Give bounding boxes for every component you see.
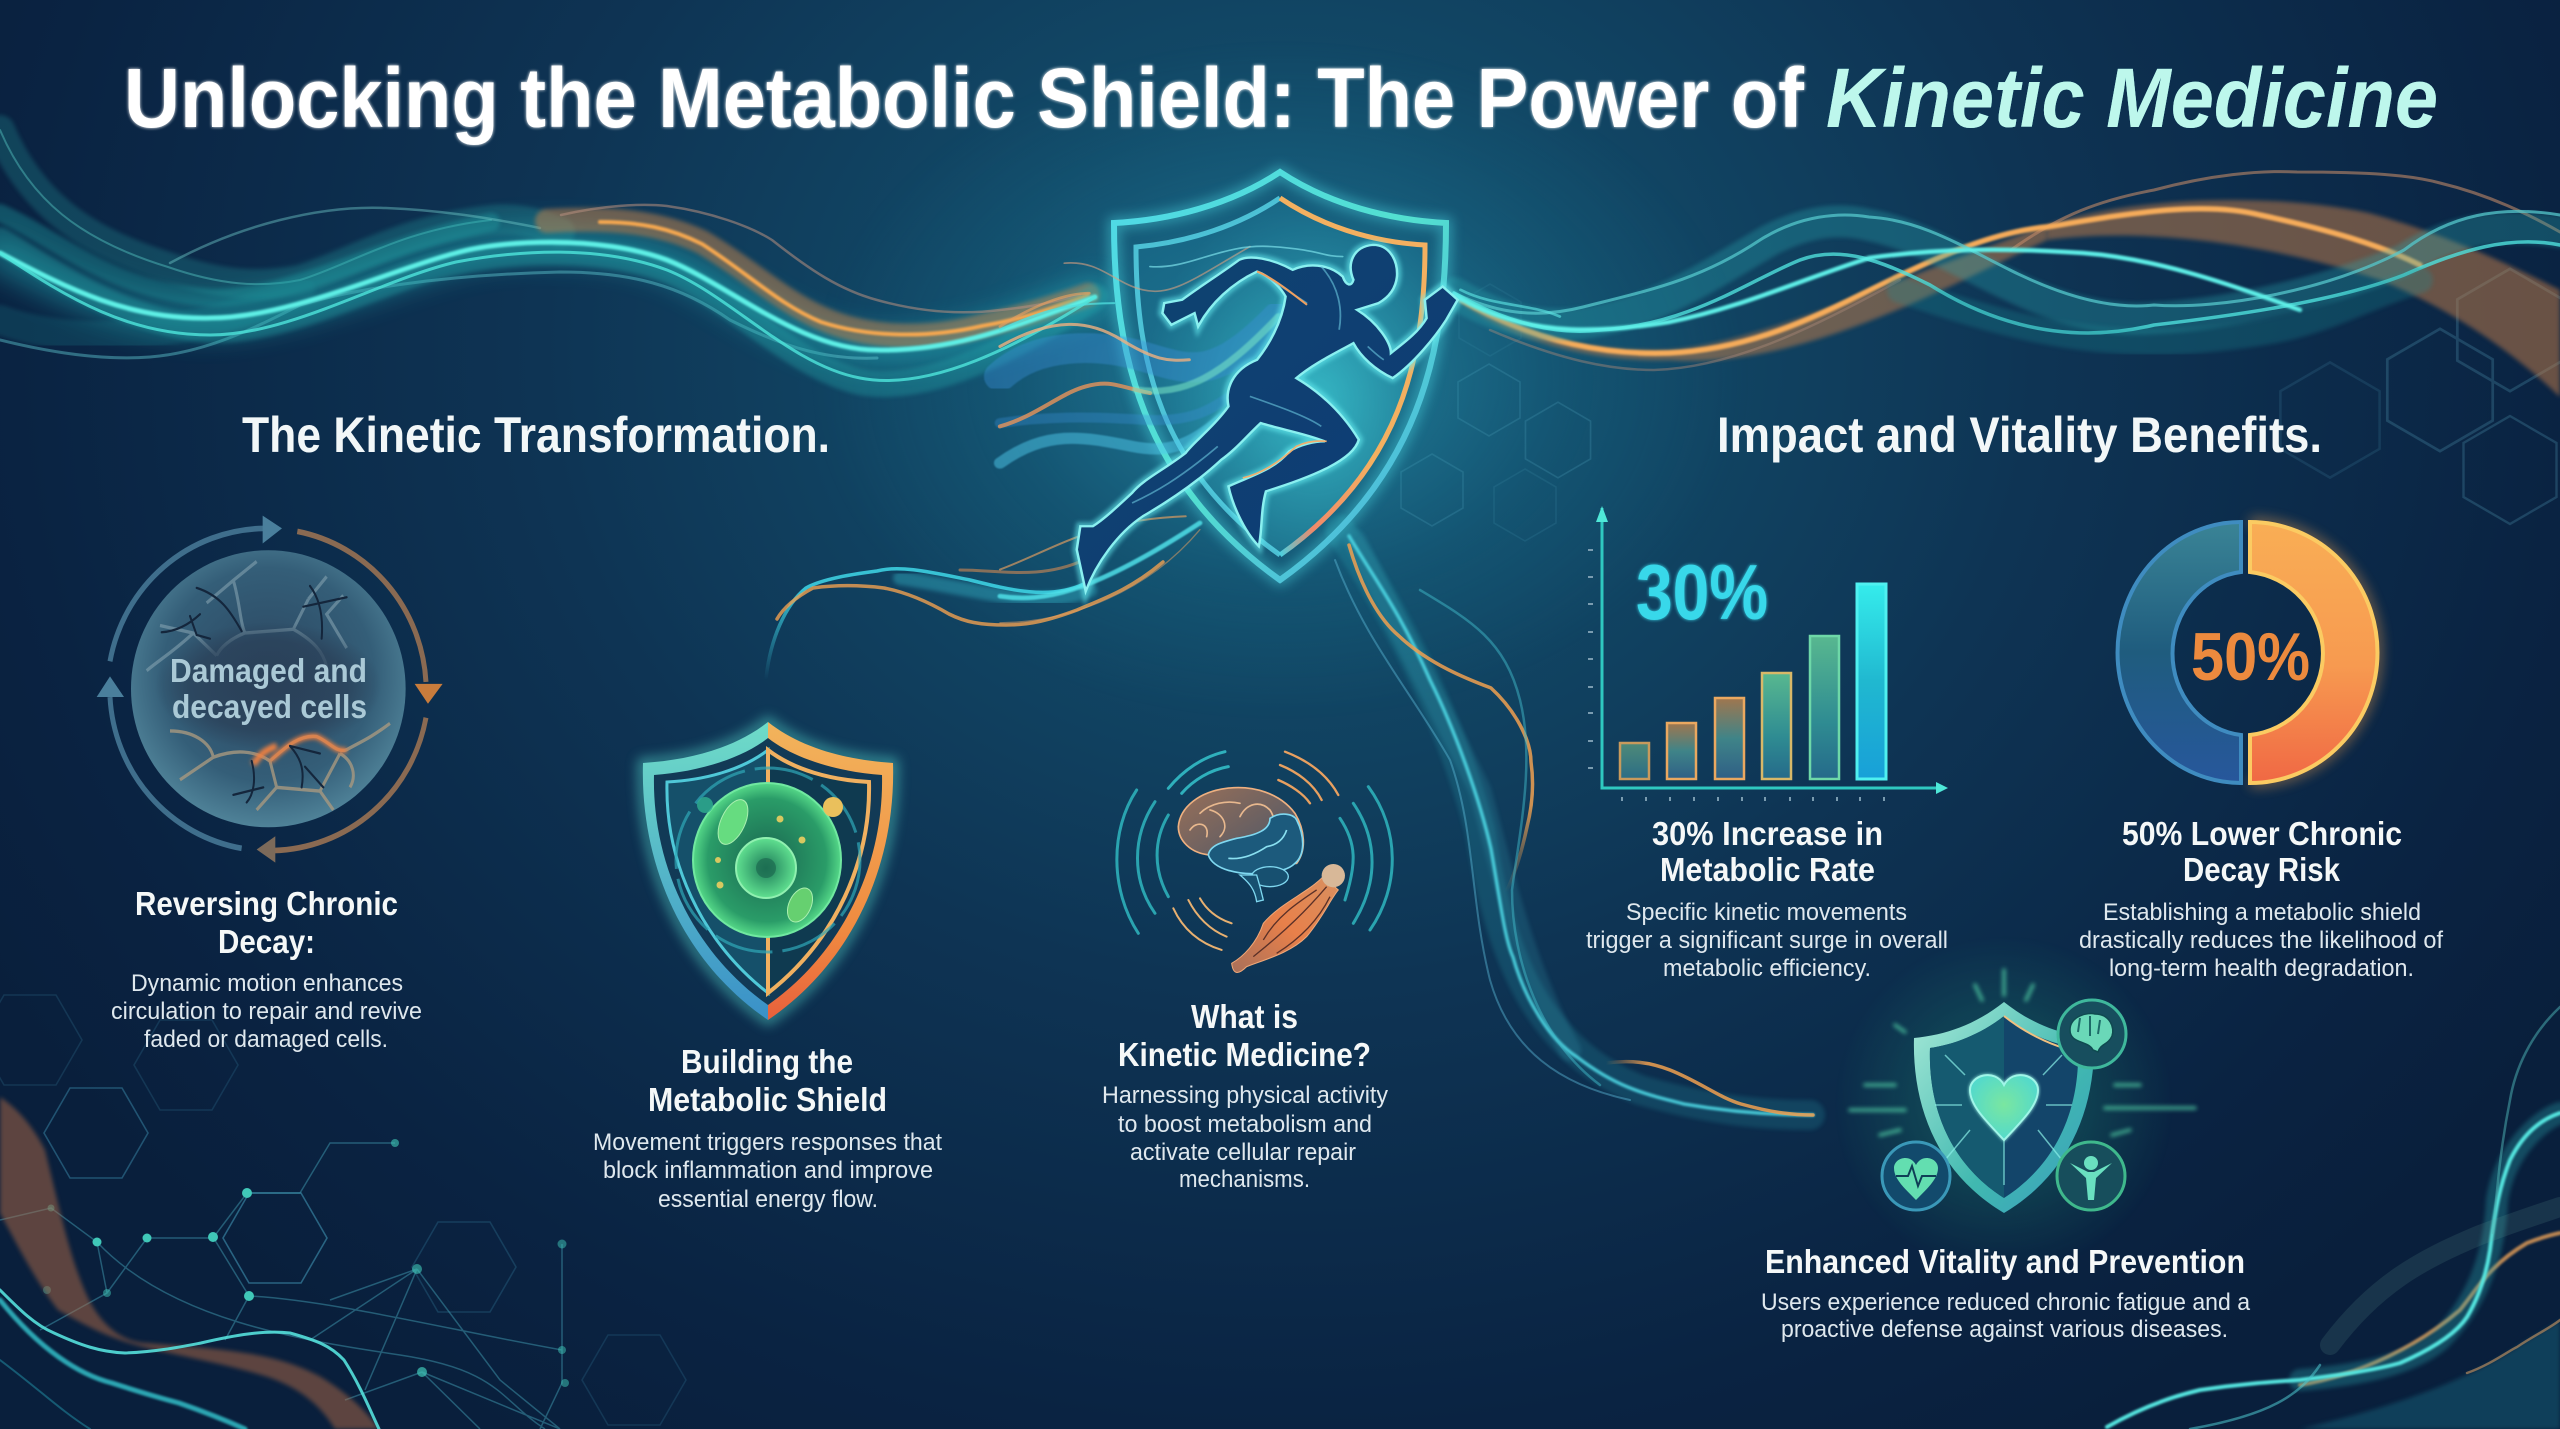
body text: drastically reduces the likelihood of xyxy=(2079,927,2443,954)
central glow xyxy=(810,40,1750,720)
icon: damaged cell with cycle arrows xyxy=(97,516,443,863)
heading xyxy=(1652,815,1883,888)
heading: Metabolic Rate xyxy=(1660,851,1875,888)
hexagon network: right xyxy=(1401,269,2560,541)
central shield and runner xyxy=(1000,172,1560,623)
body text: metabolic efficiency. xyxy=(1663,955,1871,982)
body text: Establishing a metabolic shield xyxy=(2103,899,2421,926)
body text xyxy=(593,1129,942,1213)
body text: circulation to repair and revive xyxy=(111,998,422,1025)
heading: Metabolic Shield xyxy=(648,1081,887,1118)
icon: heartbeat badge xyxy=(1882,1142,1950,1210)
body text: faded or damaged cells. xyxy=(144,1026,388,1053)
panel: reversing chronic decay xyxy=(97,516,443,1053)
bar chart xyxy=(1588,506,1948,801)
network: bottom left xyxy=(0,995,686,1429)
heading xyxy=(135,885,398,960)
body text: trigger a significant surge in overall xyxy=(1586,927,1948,954)
flow trail: down to vitality shield xyxy=(1335,530,1813,1115)
icon: vitality shield xyxy=(1834,935,2195,1275)
body text xyxy=(2079,899,2443,982)
body text: to boost metabolism and xyxy=(1118,1111,1372,1138)
panel: enhanced vitality and prevention xyxy=(1761,935,2251,1343)
body text: Specific kinetic movements xyxy=(1626,899,1907,926)
motion streaks xyxy=(1000,246,1560,623)
section heading: right: Impact and Vitality Benefits. xyxy=(1717,407,2322,463)
shield: central xyxy=(1114,172,1446,580)
heading: Building the xyxy=(681,1043,853,1080)
body text xyxy=(1102,1082,1388,1193)
heading: Enhanced Vitality and Prevention xyxy=(1765,1243,2245,1280)
body text: proactive defense against various diseases. xyxy=(1781,1316,2228,1343)
stat: 30%: 30% xyxy=(1636,548,1768,636)
corner waves: bottom left xyxy=(0,1097,379,1429)
body text: block inflammation and improve xyxy=(603,1157,933,1184)
flow waves: upper left xyxy=(0,130,1095,384)
body text: long-term health degradation. xyxy=(2109,955,2414,982)
panel: what is kinetic medicine xyxy=(1102,752,1392,1193)
heading: 30% Increase in xyxy=(1652,815,1883,852)
flow trail: left of runner xyxy=(766,560,1163,679)
body text xyxy=(111,970,422,1053)
title: Unlocking the Metabolic Shield: The Power of xyxy=(124,51,1805,145)
flow waves: upper right xyxy=(1454,172,2560,397)
heading: Decay: xyxy=(218,923,315,960)
icon: shield with cell xyxy=(643,722,893,1020)
body text: Users experience reduced chronic fatigue and a xyxy=(1761,1289,2251,1316)
icon label: Damaged and xyxy=(170,652,367,689)
heading: Decay Risk xyxy=(2183,851,2341,888)
heading xyxy=(648,1043,887,1118)
icon label xyxy=(170,652,367,725)
body text: activate cellular repair xyxy=(1130,1139,1356,1166)
icon label: decayed cells xyxy=(172,688,367,725)
heading: What is xyxy=(1191,998,1298,1035)
heading xyxy=(2122,815,2402,888)
title: Kinetic Medicine xyxy=(1826,51,2438,145)
body text: Harnessing physical activity xyxy=(1102,1082,1388,1109)
body text xyxy=(1761,1289,2251,1343)
panel: 30% increase in metabolic rate xyxy=(1586,506,1948,982)
body text: essential energy flow. xyxy=(658,1186,878,1213)
heading xyxy=(1118,998,1371,1073)
donut chart xyxy=(2118,522,2377,783)
icon: person badge xyxy=(2057,1142,2125,1210)
corner waves: bottom right xyxy=(2107,1007,2560,1429)
runner silhouette xyxy=(1077,245,1458,591)
icon: brain and muscle xyxy=(1117,752,1392,972)
body text: Movement triggers responses that xyxy=(593,1129,942,1156)
heading: 50% Lower Chronic xyxy=(2122,815,2402,852)
body text xyxy=(1586,899,1948,982)
heading: Reversing Chronic xyxy=(135,885,398,922)
panel: building the metabolic shield xyxy=(593,722,942,1213)
stat: 50%: 50% xyxy=(2191,619,2310,695)
section heading: left: The Kinetic Transformation. xyxy=(242,407,830,463)
heading: Kinetic Medicine? xyxy=(1118,1036,1371,1073)
body text: Dynamic motion enhances xyxy=(131,970,403,997)
body text: mechanisms. xyxy=(1179,1166,1310,1193)
icon: brain badge xyxy=(2058,1000,2126,1068)
panel: 50% lower chronic decay risk xyxy=(2079,522,2443,982)
